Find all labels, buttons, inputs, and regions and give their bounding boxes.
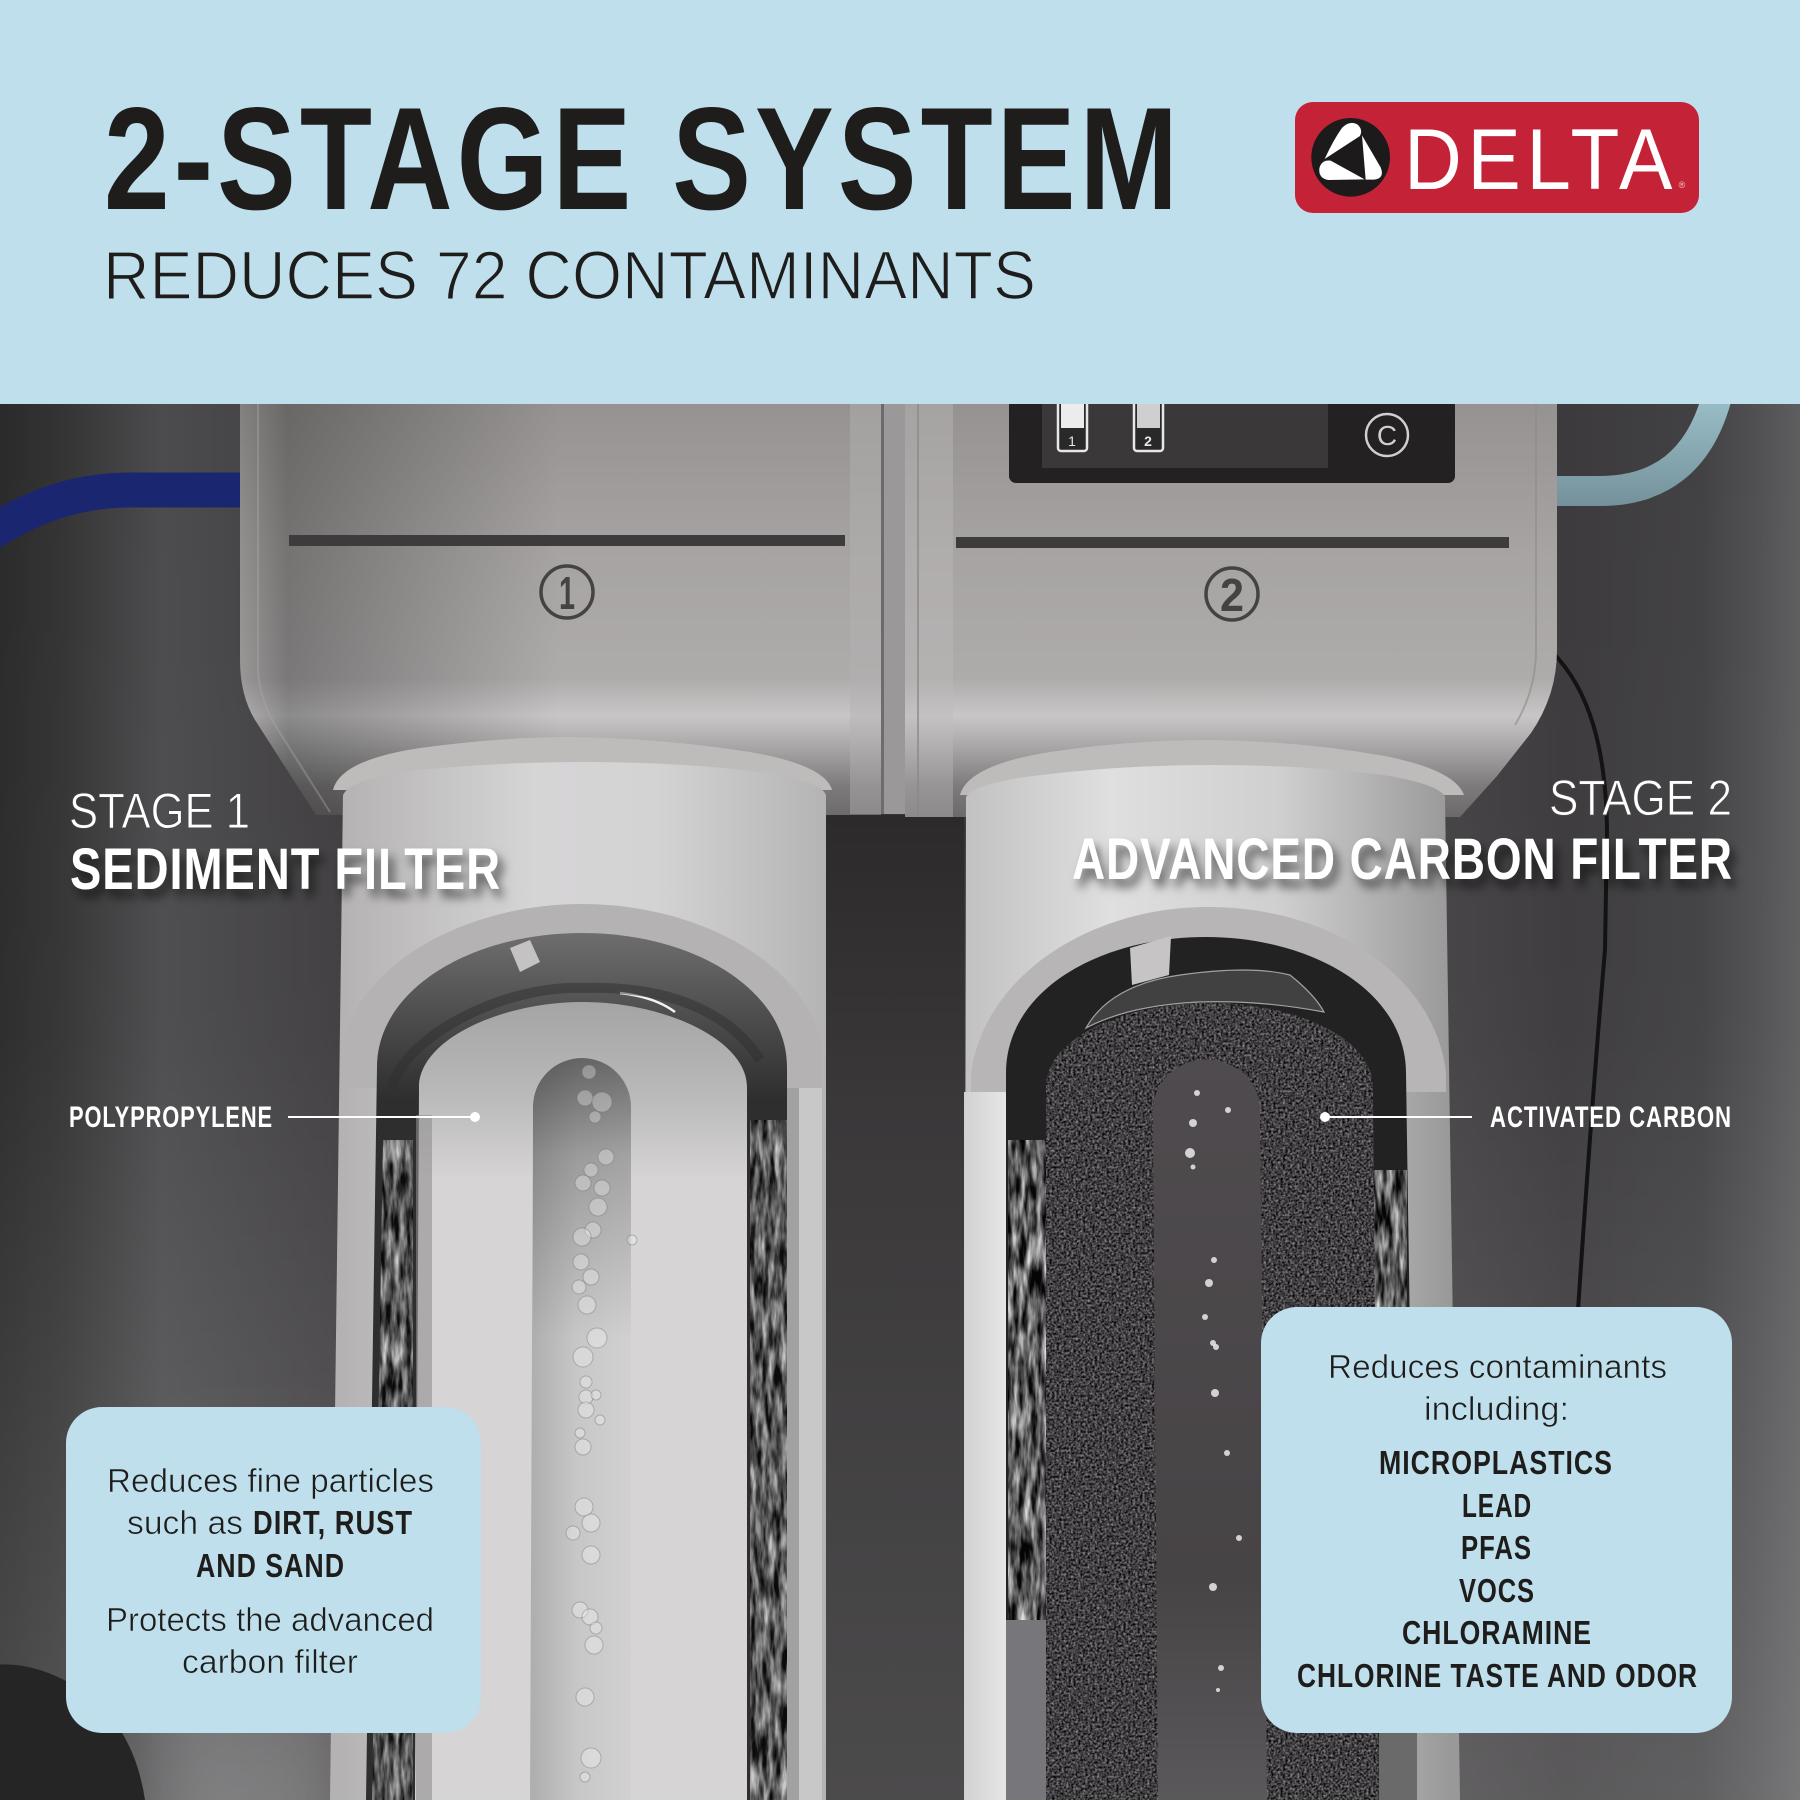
panel: stage 1 benefits: DIRT, RUST <box>253 1504 413 1541</box>
number 1 marker: 1 <box>559 567 575 619</box>
slot <box>289 535 845 546</box>
Delta logo <box>1295 102 1699 213</box>
activated carbon media <box>1046 1003 1379 1800</box>
glass highlights <box>392 940 760 1090</box>
stage 1 heading: SEDIMENT FILTER <box>70 837 501 902</box>
subtitle: REDUCES 72 CONTAMINANTS <box>103 237 1036 314</box>
display panel: C <box>1377 420 1397 451</box>
panel: stage 2 benefits: CHLORAMINE <box>1402 1614 1592 1651</box>
header band <box>0 0 1800 404</box>
bubbles stage 1 <box>566 1065 637 1782</box>
window glass <box>366 933 787 1800</box>
panel: stage 1 benefits: Protects the advanced <box>106 1601 434 1638</box>
callout: polypropylene: POLYPROPYLENE <box>69 1101 273 1134</box>
photo background <box>0 404 1800 1800</box>
panel: stage 2 benefits <box>1261 1307 1732 1733</box>
black power cord <box>1552 652 1607 1310</box>
stage 2 heading <box>1072 770 1733 892</box>
slot <box>956 537 1509 548</box>
central core <box>530 1058 631 1800</box>
lower glass left <box>1006 1620 1046 1800</box>
display panel: 2 <box>1144 433 1152 449</box>
callout: polypropylene <box>69 1101 480 1134</box>
panel: stage 1 benefits: such as <box>127 1504 243 1541</box>
panel: stage 2 benefits: PFAS <box>1461 1529 1532 1566</box>
reflective notch <box>1130 936 1171 985</box>
registered mark: ® <box>1679 180 1686 190</box>
panel: stage 1 benefits <box>66 1407 481 1733</box>
stage 2 heading: STAGE 2 <box>1549 770 1732 826</box>
panel: stage 2 benefits: CHLORINE TASTE AND ODOR <box>1297 1657 1698 1694</box>
dark round object lower left <box>0 1664 145 1800</box>
bubbles stage 2 <box>1185 1090 1242 1692</box>
panel: stage 2 benefits: MICROPLASTICS <box>1379 1444 1613 1481</box>
panel: stage 2 benefits: including: <box>1424 1390 1569 1427</box>
lower glass right <box>1379 1733 1417 1800</box>
central core <box>1153 1060 1267 1800</box>
filter cylinder stage 2 <box>964 765 1460 1800</box>
polypropylene filter media <box>415 1002 747 1800</box>
housing: stage 2 head <box>905 360 1557 817</box>
display panel: 1 <box>1068 433 1076 449</box>
wordmark: DELTA <box>1404 112 1678 208</box>
number 1 marker <box>541 566 593 619</box>
panel: stage 1 benefits: Reduces fine particles <box>107 1462 434 1499</box>
side water left <box>372 1140 413 1800</box>
title: 2-STAGE SYSTEM <box>104 77 1182 240</box>
panel: stage 2 benefits: Reduces contaminants <box>1328 1348 1667 1385</box>
panel: stage 2 benefits: LEAD <box>1462 1487 1532 1524</box>
number 2 marker <box>1206 568 1258 621</box>
stage 1 heading <box>69 783 501 902</box>
water crescent <box>1086 970 1324 1028</box>
housing: stage 1 head <box>240 404 905 815</box>
panel: stage 1 benefits: carbon filter <box>182 1643 358 1680</box>
side water right <box>750 1120 787 1800</box>
stage 1 heading: STAGE 1 <box>69 783 250 839</box>
callout: activated carbon <box>1320 1101 1732 1134</box>
side water left <box>1008 1140 1046 1620</box>
media edge shadow <box>416 1115 432 1800</box>
side water right <box>1373 1170 1407 1320</box>
icon: Delta triangle mark <box>1311 118 1390 197</box>
collar stage 1 <box>333 737 832 790</box>
arch band <box>971 907 1446 1092</box>
display panel <box>1009 360 1455 483</box>
collar stage 2 <box>960 740 1464 795</box>
filter cylinder stage 1 <box>330 762 826 1800</box>
blue water hose <box>0 490 245 535</box>
window glass <box>1006 937 1417 1800</box>
panel: stage 2 benefits: VOCS <box>1459 1572 1535 1609</box>
number 2 marker: 2 <box>1220 569 1244 621</box>
arch band <box>342 904 822 1088</box>
panel: stage 1 benefits: AND SAND <box>196 1547 345 1584</box>
light blue water hose <box>1550 400 1716 491</box>
